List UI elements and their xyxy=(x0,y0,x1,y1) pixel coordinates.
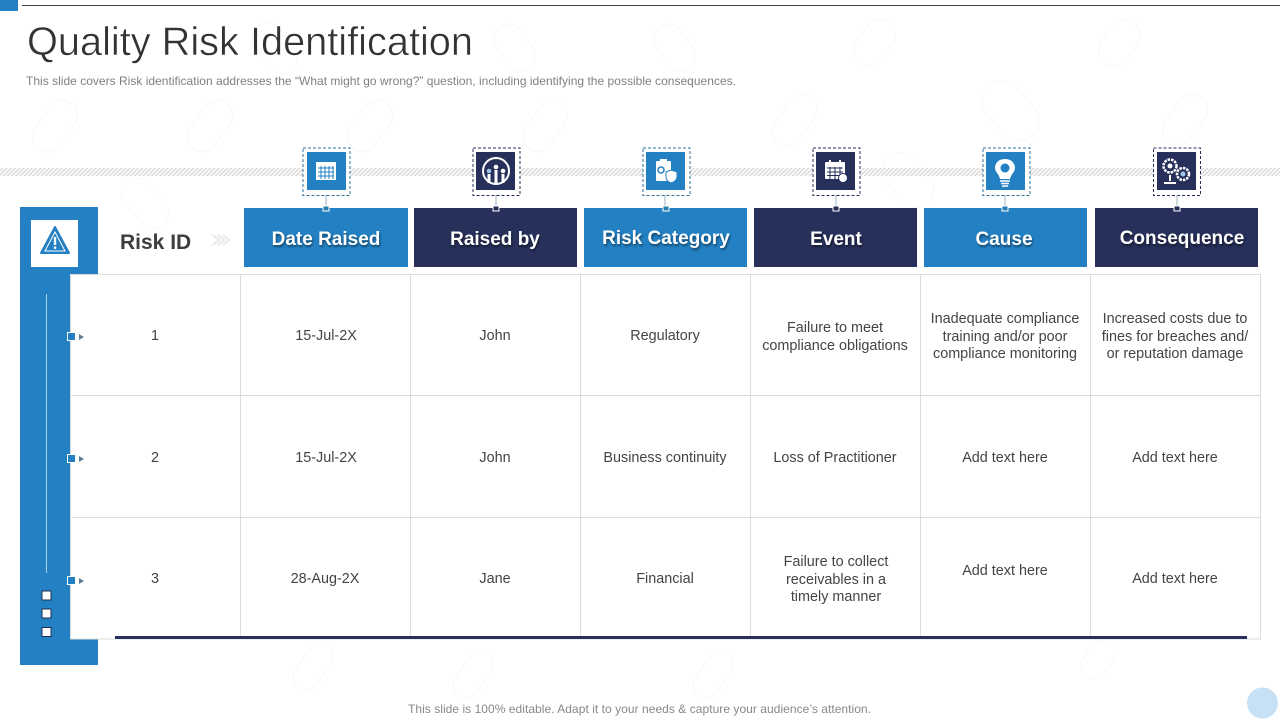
table row 2: 15-Jul-2X xyxy=(295,450,357,466)
table row 1: Increased costs due to xyxy=(1103,311,1247,327)
icon: gears xyxy=(1154,148,1200,211)
footer note: This slide is 100% editable. Adapt it to your needs & capture your audience’s attention. xyxy=(408,702,871,716)
subtitle: This slide covers Risk identification addresses the “What might go wrong?” question, including identifying the possible consequences. xyxy=(26,74,736,88)
table row 3: receivables in a xyxy=(786,572,886,588)
icon: hands in circle xyxy=(473,148,520,211)
table row 3: Jane xyxy=(479,571,511,587)
table row 1: Regulatory xyxy=(630,328,701,344)
icon: double chevrons xyxy=(213,235,229,245)
table row 1: Failure to meet xyxy=(787,320,883,336)
column header: Cause xyxy=(924,208,1087,267)
icon: calendar xyxy=(303,148,350,211)
table row 2: Add text here xyxy=(1132,450,1218,466)
column header: Raised by xyxy=(414,208,577,267)
table row 3: Failure to collect xyxy=(784,554,888,570)
table row 1: 15-Jul-2X xyxy=(295,328,357,344)
table row 2: Business continuity xyxy=(603,450,727,466)
table row 3: 3 xyxy=(151,571,159,587)
column header: Date Raised: Date Raised xyxy=(272,229,380,250)
table row 2: John xyxy=(479,450,511,466)
table row 1: compliance monitoring xyxy=(933,346,1077,362)
table row 1 xyxy=(151,311,1248,362)
column header: Cause: Cause xyxy=(975,229,1033,250)
table row 2: 2 xyxy=(151,450,159,466)
table xyxy=(70,274,1260,639)
row markers xyxy=(68,332,84,584)
icon: warning triangle xyxy=(31,220,78,267)
icon: calendar with star xyxy=(813,148,860,211)
column header: Raised by: Raised by xyxy=(450,229,540,250)
table row 1: 1 xyxy=(151,328,159,344)
panel: blue side panel xyxy=(20,207,98,665)
column header: Event xyxy=(754,208,917,267)
column header: Risk Category: Risk Category xyxy=(602,228,730,249)
table row 1: John xyxy=(479,328,511,344)
table row 2: Add text here xyxy=(962,450,1048,466)
table row 3: Add text here xyxy=(1132,571,1218,587)
table row 3: timely manner xyxy=(791,589,881,605)
table row 3: Financial xyxy=(636,571,694,587)
icon: clipboard and shield xyxy=(643,148,690,211)
table row 2: Loss of Practitioner xyxy=(773,450,897,466)
column header: Risk Category xyxy=(584,208,747,267)
table row 1: fines for breaches and/ xyxy=(1102,329,1248,345)
table row 1: Inadequate compliance xyxy=(931,311,1079,327)
column header: Consequence xyxy=(1095,208,1258,267)
hatched band xyxy=(0,168,1280,176)
table row 2 xyxy=(151,450,1218,466)
heading: Risk ID: Risk ID xyxy=(120,231,191,254)
top accent bar xyxy=(0,0,1280,11)
table row 1: training and/or poor xyxy=(943,329,1068,345)
column header: Date Raised xyxy=(244,208,408,267)
table row 3: Add text here xyxy=(962,563,1048,579)
icon: light bulb xyxy=(983,148,1030,211)
column header: Event: Event xyxy=(810,229,863,250)
table row 1: compliance obligations xyxy=(762,338,908,354)
table row 1: or reputation damage xyxy=(1107,346,1243,362)
corner circle xyxy=(1247,688,1278,718)
table row 3: 28-Aug-2X xyxy=(291,571,360,587)
title: Quality Risk Identification xyxy=(27,20,473,64)
table row 3 xyxy=(151,554,1218,605)
column header: Consequence: Consequence xyxy=(1120,228,1244,249)
